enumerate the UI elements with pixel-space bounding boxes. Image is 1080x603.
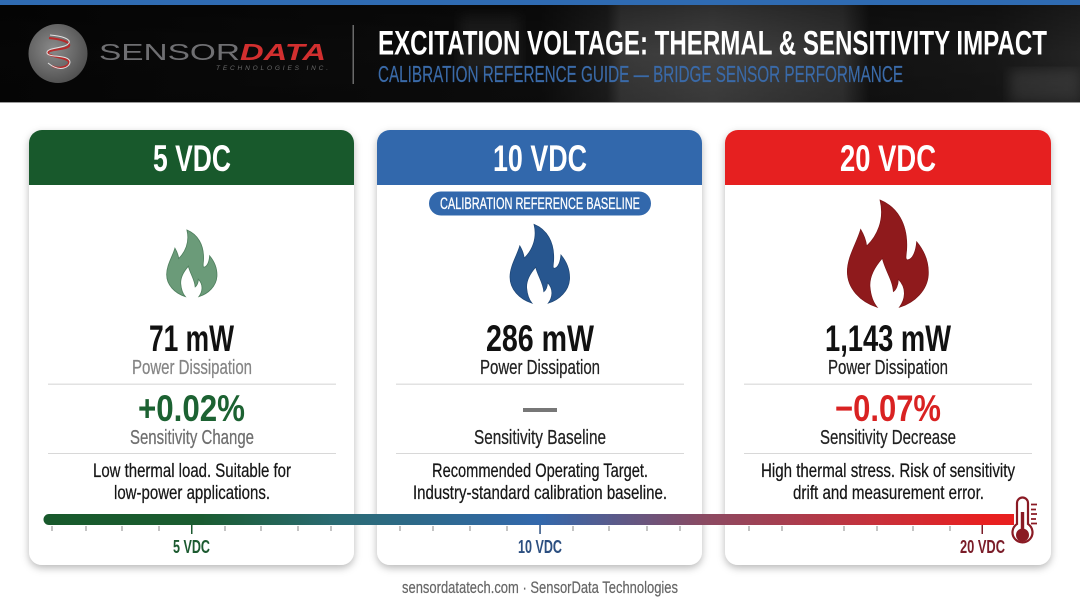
baseline dash bbox=[523, 408, 557, 412]
description: Low thermal load. Suitable for bbox=[93, 460, 291, 482]
footer: sensordatatech.com · SensorData Technologies bbox=[402, 578, 678, 597]
description: drift and measurement error. bbox=[793, 482, 984, 504]
description: High thermal stress. Risk of sensitivity bbox=[761, 460, 1015, 482]
panel: 20 VDC bbox=[725, 130, 1051, 565]
card header: 20 VDC bbox=[725, 130, 1051, 185]
label: 10 VDC: 10 VDC bbox=[518, 536, 562, 557]
logo: SensorData Technologies: DATA bbox=[240, 39, 326, 65]
voltage heading: 20 VDC bbox=[840, 138, 936, 179]
icon: thermometer bbox=[1013, 498, 1037, 542]
description bbox=[413, 460, 667, 504]
header banner bbox=[0, 0, 1080, 103]
minor ticks bbox=[52, 526, 950, 531]
badge: calibration reference baseline bbox=[429, 192, 651, 216]
major tick 10 VDC bbox=[539, 525, 541, 534]
label: 20 VDC: 20 VDC bbox=[960, 536, 1005, 557]
description: Recommended Operating Target. bbox=[432, 460, 648, 482]
gradient bar bbox=[44, 514, 1014, 525]
icon: green flame bbox=[167, 230, 217, 297]
sensitivity value: +0.02% bbox=[138, 388, 245, 429]
power label: Power Dissipation bbox=[828, 357, 948, 379]
power value: 71 mW bbox=[149, 318, 234, 359]
sensitivity label: Sensitivity Decrease bbox=[820, 427, 956, 449]
power label: Power Dissipation bbox=[132, 357, 252, 379]
label: 5 VDC: 5 VDC bbox=[173, 536, 210, 557]
power value: 1,143 mW bbox=[825, 318, 951, 359]
icon: red flame bbox=[847, 200, 928, 307]
description bbox=[761, 460, 1015, 504]
sensitivity label: Sensitivity Baseline bbox=[474, 427, 606, 449]
voltage gradient scale bbox=[44, 514, 1014, 557]
sensitivity label: Sensitivity Change bbox=[130, 427, 254, 449]
card header: 10 VDC bbox=[377, 130, 702, 185]
badge: calibration reference baseline: CALIBRATION REFERENCE BASELINE bbox=[440, 195, 640, 213]
description bbox=[93, 460, 291, 504]
panel: 10 VDC bbox=[377, 130, 702, 565]
logo: SensorData Technologies bbox=[28, 24, 328, 83]
voltage heading: 10 VDC bbox=[493, 138, 587, 179]
panel: 5 VDC bbox=[29, 130, 354, 565]
description: low-power applications. bbox=[114, 482, 270, 504]
sensitivity value: −0.07% bbox=[835, 388, 941, 429]
logo: SensorData Technologies: TECHNOLOGIES INC. bbox=[216, 65, 328, 72]
power value: 286 mW bbox=[486, 318, 594, 359]
description: Industry-standard calibration baseline. bbox=[413, 482, 667, 504]
logo: SensorData Technologies: SENSOR bbox=[99, 39, 240, 65]
voltage heading: 5 VDC bbox=[153, 138, 231, 179]
major tick 20 VDC bbox=[982, 525, 983, 534]
header divider bbox=[352, 25, 354, 84]
card header: 5 VDC bbox=[29, 130, 354, 185]
major tick 5 VDC bbox=[191, 525, 192, 534]
power label: Power Dissipation bbox=[480, 357, 600, 379]
icon: blue flame bbox=[510, 224, 570, 303]
